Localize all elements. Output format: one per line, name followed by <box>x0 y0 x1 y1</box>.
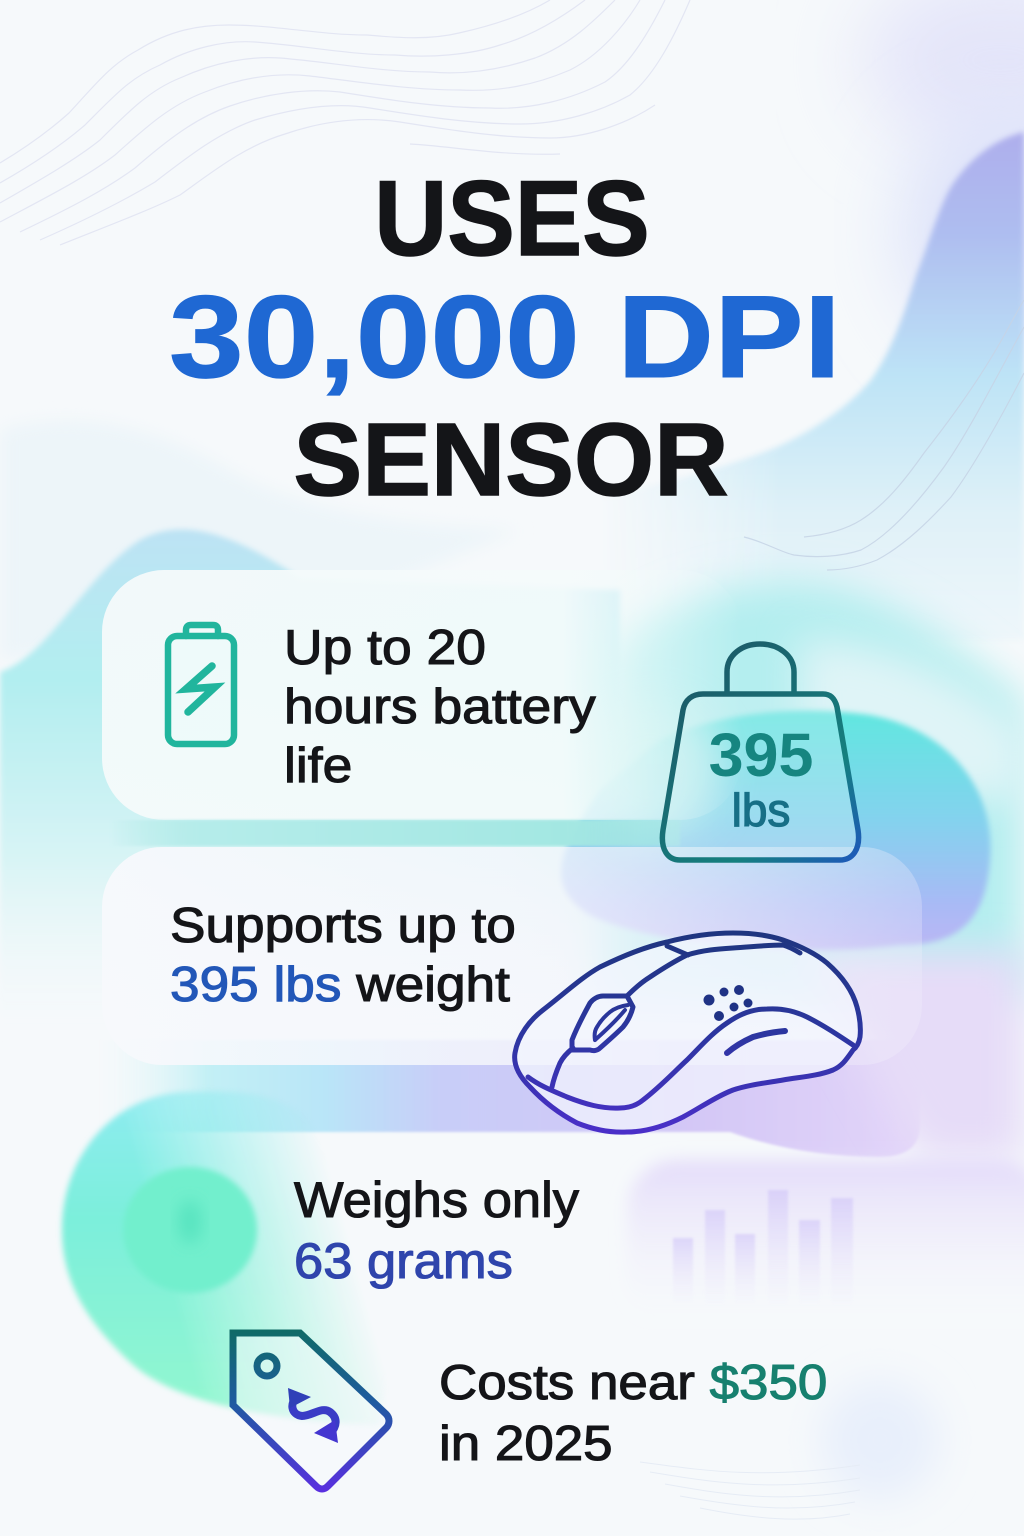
icon: mouse <box>512 930 863 1135</box>
text: weight support: Supports up to <box>170 899 516 953</box>
icon: weight bag 395 lbs <box>660 641 862 863</box>
text: battery life: Up to 20 <box>284 621 486 675</box>
text: weight in grams <box>294 1172 580 1289</box>
heading: SENSOR: SENSOR <box>294 402 728 517</box>
heading: 30,000 DPI: 30,000 DPI <box>169 271 841 402</box>
text: price: Costs near $350 <box>439 1356 827 1410</box>
weight value: 395 <box>709 721 813 789</box>
text: battery life: life <box>284 739 352 793</box>
text: weight in grams: 63 grams <box>294 1233 513 1289</box>
icon: price tag <box>230 1330 392 1492</box>
text: weight support: 395 lbs weight <box>170 958 510 1012</box>
faint bar chart <box>673 1190 853 1305</box>
heading: USES: USES <box>374 158 650 278</box>
icon: battery <box>164 622 238 748</box>
title <box>169 158 841 517</box>
text: weight support <box>170 899 516 1012</box>
text: weight in grams: Weighs only <box>294 1172 579 1228</box>
text: battery life <box>284 621 596 793</box>
weight unit: lbs <box>732 784 790 836</box>
text: price: in 2025 <box>439 1417 613 1471</box>
contour lines <box>0 0 690 245</box>
text: price <box>439 1356 827 1471</box>
text: battery life: hours battery <box>284 680 596 734</box>
card shadows and cards <box>102 570 742 820</box>
